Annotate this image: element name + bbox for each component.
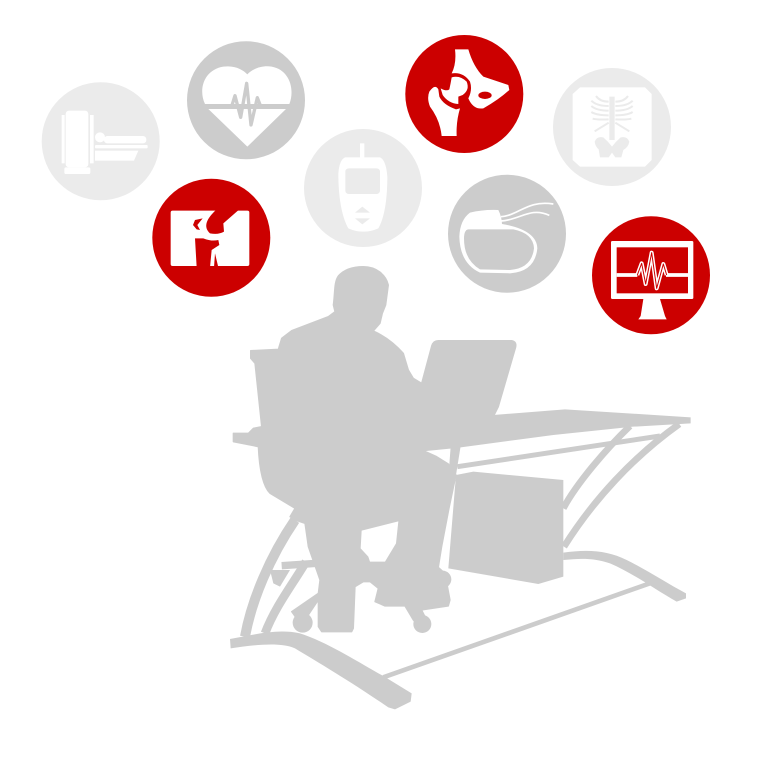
desk top (407, 409, 691, 452)
icon: pacemaker (448, 175, 566, 293)
icon: ECG monitor (592, 216, 710, 334)
desk front leg (449, 446, 461, 475)
chair casters (293, 613, 313, 633)
storage box (448, 472, 563, 584)
icon: glucose meter (304, 129, 422, 247)
desk frame (230, 424, 686, 709)
icon: knee joint (152, 179, 270, 297)
person and chair silhouette (233, 267, 516, 633)
icon: CT scanner (42, 82, 160, 200)
icon: hip joint (405, 35, 523, 153)
icon: heart with ECG (187, 41, 305, 159)
gap between legs and chair post (361, 521, 398, 562)
icon: chest x-ray (553, 68, 671, 186)
person seated at desk with laptop (230, 267, 691, 709)
